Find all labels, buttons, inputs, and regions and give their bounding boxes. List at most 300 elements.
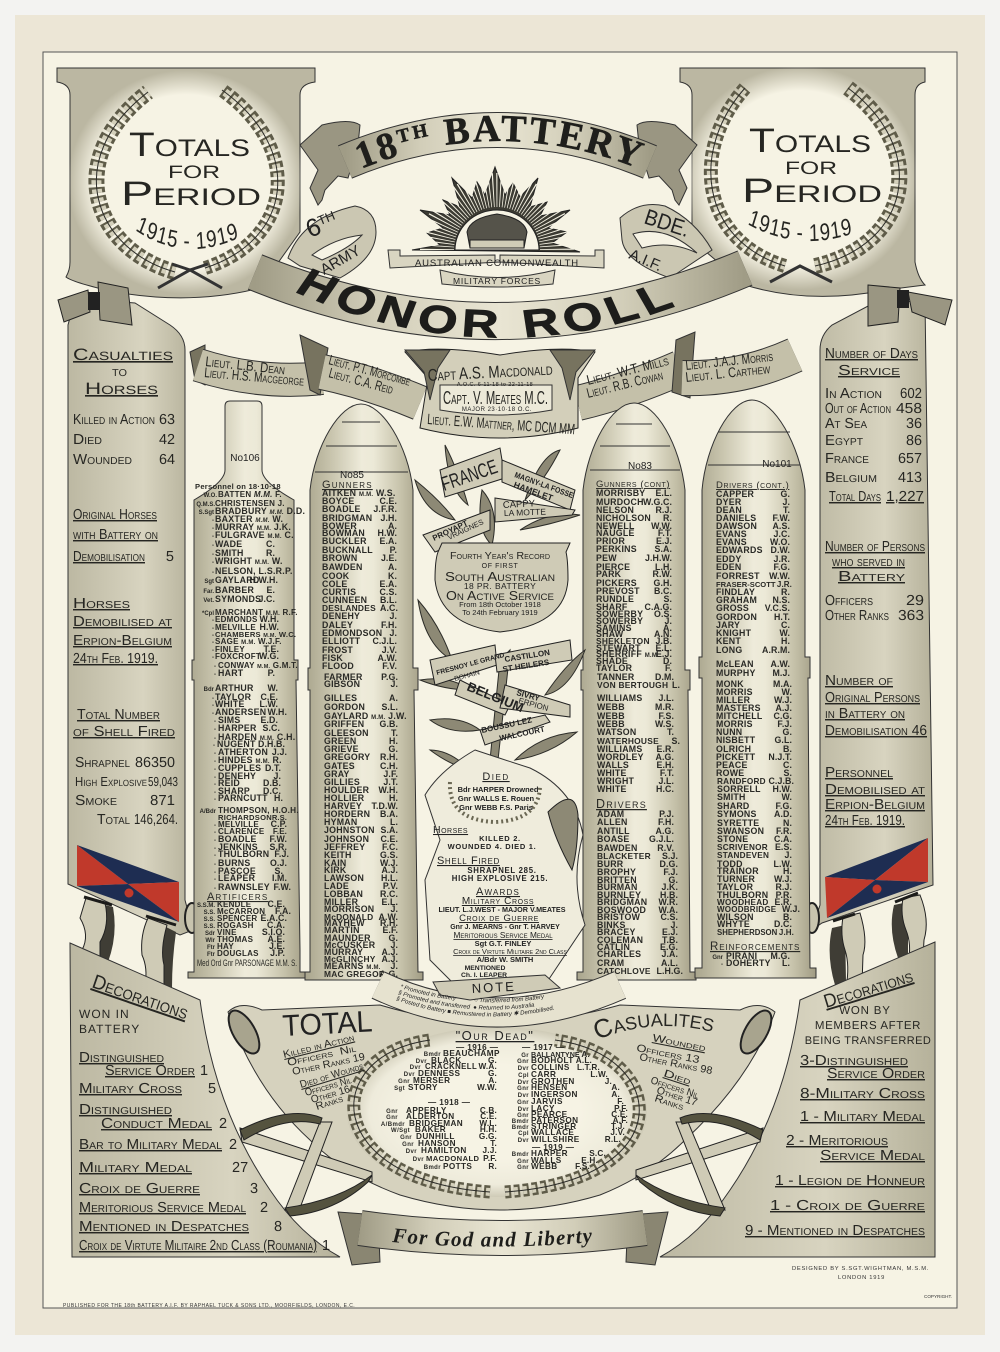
roster: personnel: GAYLARD — [215, 575, 259, 585]
ribbon ends — [300, 122, 697, 205]
casualties title: Casualites — [594, 1014, 714, 1038]
ray stripes — [437, 190, 557, 250]
roster: gunners: G.S. — [380, 850, 398, 860]
roster: gunners: P.V. — [383, 881, 398, 891]
text: casualties: High Explosive — [75, 774, 147, 789]
roll: 1916 and 1918: R. — [488, 1162, 497, 1171]
roster: personnel: BAXTER M.M. W. — [215, 514, 283, 524]
la motte text: LA MOTTE — [504, 507, 546, 518]
roster: personnel: H. — [274, 793, 283, 803]
roster: drivers continued: STONE — [717, 834, 748, 844]
roll: 1916 and 1918: Dvr — [416, 1059, 427, 1065]
roster: drivers continued: L.W. — [774, 859, 792, 869]
roll: 1916 and 1918: — 1916 — — [456, 1043, 499, 1052]
roster: drivers continued: SHEPHERDSON — [717, 928, 778, 937]
roll: 1917 and 1919: E.H. — [581, 1156, 598, 1165]
text: casualties: with Battery on — [73, 527, 158, 543]
roster: gunners continued: ANTILL — [597, 826, 630, 836]
roster: drivers continued: TURNER — [717, 874, 756, 884]
roster: drivers continued: W.J. — [774, 874, 792, 884]
roster: personnel: - — [214, 759, 216, 765]
roster: personnel: DENEHY — [218, 771, 256, 781]
roster: personnel: ANDERSEN — [215, 707, 266, 717]
roster: gunners: BOWMAN — [322, 528, 365, 538]
killed in action left notes: Other 16 — [310, 1083, 351, 1106]
panel: number of days service — [812, 285, 952, 930]
roll: 1917 and 1919: WEBB — [531, 1162, 558, 1171]
roster: drivers continued: DOHERTY — [726, 958, 771, 968]
roster: personnel: Personnel on 18·10·18 — [195, 482, 281, 491]
roster: gunners continued: J. — [664, 616, 672, 626]
roster: gunners continued: S. — [663, 594, 672, 604]
won in battery: Military Cross — [79, 1081, 182, 1097]
roster: personnel: SAGE M.M. W.J.F. — [215, 637, 282, 646]
roster: gunners continued: S.J. — [662, 851, 678, 861]
roster: personnel: O.J. — [270, 858, 287, 868]
ribbon crescent — [633, 231, 697, 253]
won in battery: Croix de Virtute Militaire 2nd Class (Roumania) — [79, 1238, 317, 1254]
scroll curl right — [805, 903, 819, 933]
transferred text: WON BY — [839, 1005, 891, 1017]
roll: 1916 and 1918: STORY — [408, 1083, 438, 1092]
record text: OF FIRST — [482, 563, 518, 570]
roster: gunners continued: PEW — [596, 553, 617, 563]
roster: gunners continued: WATERHOUSE — [597, 736, 659, 746]
record text: Fourth Year's Record — [450, 550, 550, 562]
text: days: Demobilised at — [825, 782, 925, 798]
roll: 1917 and 1919: Bmdr — [512, 1152, 529, 1158]
roster: drivers continued: P.R. — [776, 890, 792, 900]
roll: 1917 and 1919: Gnr — [517, 1100, 529, 1106]
text: days: 1,227 — [886, 489, 924, 505]
roster: drivers continued: T. — [783, 505, 790, 515]
roster: gunners continued: SOWERBY — [596, 609, 643, 619]
bohain text: BOHAIN — [454, 669, 481, 683]
wounded right notes: Other 17 — [655, 1084, 699, 1109]
total title: TOTAL — [282, 1005, 373, 1043]
roster: gunners: LAWSON — [324, 873, 364, 883]
roll: 1916 and 1918: HANSON — [418, 1139, 456, 1148]
roster: personnel: MARCHANT M.M. R.F. — [215, 608, 298, 617]
roll: 1917 and 1919: HENSEN — [531, 1083, 568, 1092]
heading: totals for period right: for — [785, 152, 837, 180]
roster: personnel: R. — [266, 548, 275, 558]
shell fired — [437, 855, 548, 883]
roster: gunners — [322, 479, 407, 979]
roll: 1917 and 1919 — [512, 1043, 628, 1171]
roster: gunners: H. — [389, 793, 398, 803]
won in battery: Meritorious Service Medal — [79, 1200, 246, 1216]
killed in action left notes: Officers Nil — [304, 1074, 353, 1099]
roster: personnel: J.P. — [270, 948, 285, 958]
roster: drivers continued: SWANSON — [717, 826, 764, 836]
roster: gunners continued: J.B. — [655, 636, 672, 646]
battery text: BATTERY — [443, 116, 645, 166]
roster: gunners: A.J. — [381, 865, 398, 875]
magny text: MAGNY-LA FOSSE — [513, 470, 575, 500]
badge: rising sun — [388, 167, 604, 287]
roster: gunners: BUCKNALL — [322, 545, 373, 555]
roster: drivers continued: H. — [781, 636, 790, 646]
roster: drivers continued: H.T. — [774, 612, 790, 622]
roster: drivers continued: F.R. — [776, 826, 792, 836]
roster: personnel: - — [214, 830, 216, 836]
roster: gunners: P. — [390, 545, 397, 555]
roll: 1917 and 1919: Bmdr — [512, 1119, 529, 1125]
roster: personnel: I.M. — [272, 873, 287, 883]
roster: gunners: A. — [389, 693, 398, 703]
roster: gunners continued: J.L. — [658, 776, 674, 786]
black tab — [88, 292, 100, 310]
roster: drivers continued: PEACE — [716, 760, 748, 770]
roster: gunners continued: SHAW — [596, 629, 624, 639]
roster: gunners: A.W. — [379, 912, 398, 922]
text: casualties: 871 — [150, 793, 175, 809]
roll: 1916 and 1918: Dvr — [404, 1072, 415, 1078]
roster: drivers continued: C. — [783, 760, 792, 770]
roster: personnel: - — [212, 570, 214, 576]
roster: gunners: KAIN — [324, 858, 347, 868]
killed in action left notes: Died of Wounds — [298, 1060, 365, 1091]
note line one: * Promoted in Battery ○ Transferred from Battery — [401, 984, 544, 1002]
roll: 1917 and 1919: Dvr — [518, 1107, 529, 1113]
roster: gunners: GRAY — [324, 769, 350, 779]
text: days: Original Persons — [825, 690, 920, 706]
roster: gunners continued: VON BERTOUGH — [597, 680, 668, 690]
roster: gunners: R.H. — [380, 752, 398, 762]
roster: drivers continued: G. — [782, 727, 792, 737]
copyright: COPYRIGHT. — [924, 1294, 952, 1299]
roster: gunners: MURRAY — [324, 947, 363, 957]
roster: gunners: S.L. — [381, 702, 398, 712]
roll: 1917 and 1919: Gr — [521, 1053, 529, 1059]
roster: drivers continued: MORRIS — [716, 687, 753, 697]
won in battery: 2 — [219, 1116, 227, 1132]
ribbon: 18th Battery — [299, 112, 698, 206]
roster: gunners continued: NEWELL — [596, 521, 635, 531]
roster: drivers continued: GROSS — [716, 603, 749, 613]
roster: gunners: GORDON — [324, 702, 365, 712]
roster: personnel: RAWNSLEY — [218, 882, 270, 892]
panel: decorations won by transferred members — [660, 942, 935, 1257]
text: days: Personnel — [825, 765, 893, 781]
roster: gunners continued: MORRISBY — [596, 488, 645, 498]
roll: 1917 and 1919: Gnr — [517, 1113, 529, 1119]
roll: 1917 and 1919: F. — [617, 1097, 624, 1106]
won in battery: BATTERY — [79, 1022, 140, 1036]
roster: drivers continued: S. — [783, 768, 792, 778]
roster: gunners continued: E.J. — [656, 536, 672, 546]
roll: 1917 and 1919: Dvr — [518, 1080, 529, 1086]
roster: drivers continued: SCRIVENOR — [717, 843, 768, 852]
awards: A/Bdr W. SMITH — [477, 955, 533, 964]
roster: gunners continued: F.S. — [658, 711, 674, 721]
text: days: 657 — [898, 451, 922, 467]
won in battery: WON IN — [79, 1007, 130, 1021]
roster: gunners: J.H. — [380, 513, 397, 523]
wounded right notes: Ranks — [653, 1092, 686, 1113]
roster: gunners continued: R.J. — [655, 505, 672, 515]
roster: gunners: W.H. — [379, 785, 398, 795]
died names: Gnr WALLS E. Rouen — [458, 794, 535, 803]
roster: gunners continued: G. — [668, 875, 678, 885]
roster: drivers continued: A.W. — [771, 659, 790, 669]
roster: drivers continued: A.D. — [774, 809, 792, 819]
roster: drivers continued: JARY — [716, 620, 740, 630]
france text: FRANCE — [438, 456, 500, 496]
roster: personnel: CUPPLES — [218, 763, 261, 773]
roster: personnel: PARNCUTT — [218, 793, 268, 803]
roster: drivers continued: WHYTE — [717, 919, 750, 929]
roster: gunners: JOHNSTON — [324, 825, 375, 835]
roster: personnel — [195, 482, 305, 968]
roster: personnel: BRADBURY M.M. D.D. — [215, 506, 305, 516]
ribbons: france — [423, 448, 575, 552]
awards: Croix de Guerre — [459, 913, 539, 924]
text: casualties: Horses — [73, 596, 130, 612]
roster: gunners continued: NICHOLSON — [596, 513, 651, 523]
roster: gunners: BAWDEN — [322, 562, 363, 572]
black tab right — [897, 290, 909, 308]
roll: 1917 and 1919: PATERSON — [531, 1116, 578, 1125]
heading: totals for period right: 1915 - 1919 — [748, 211, 851, 242]
designer credit: DESIGNED BY S.SGT.WIGHTMAN, M.S.M. — [792, 1266, 929, 1272]
roll: 1917 and 1919: Cpl — [518, 1073, 529, 1079]
roster: gunners continued: P.J. — [659, 809, 674, 819]
roster: personnel: - — [214, 846, 216, 852]
roster: gunners continued: R.V. — [657, 843, 674, 853]
record text — [445, 550, 555, 617]
roster: gunners continued: A.G. — [656, 826, 674, 836]
roster: drivers continued: TAYLOR — [717, 882, 754, 892]
roster: gunners: JEFFREY — [324, 842, 365, 852]
roll: 1917 and 1919: A. — [611, 1090, 620, 1099]
roster: gunners: HORDERN — [324, 809, 370, 819]
designer credit — [792, 1266, 929, 1281]
roll: 1916 and 1918: BAKER — [415, 1125, 446, 1134]
roster: gunners: MAC GREGOR — [324, 969, 385, 979]
text: days: 29 — [906, 593, 924, 609]
roll: 1917 and 1919: A.F. — [613, 1116, 628, 1125]
roster: personnel: MELVILLE — [218, 820, 259, 829]
roster: gunners continued: ALLEN — [597, 817, 628, 827]
roster: gunners continued: R. — [663, 513, 672, 523]
roster: personnel: PASCOE — [218, 866, 256, 876]
roll: 1917 and 1919: Gnr — [517, 1086, 529, 1092]
roll: 1917 and 1919: A.L. — [576, 1056, 592, 1065]
roster: gunners: MILLER — [324, 897, 359, 907]
roster: gunners continued: WILLIAMS — [597, 744, 642, 754]
record text: South Australian — [445, 569, 555, 584]
roll: 1916 and 1918: W/Sgt — [391, 1128, 410, 1134]
roster: drivers continued: LONG — [716, 645, 742, 655]
roster: gunners: FARMER — [324, 672, 363, 682]
roll: 1917 and 1919: BODHOLT — [531, 1056, 574, 1065]
scroll straps left — [78, 897, 199, 996]
text: casualties: Killed in Action — [73, 412, 155, 428]
roster: personnel: W.G. — [259, 651, 279, 661]
text: days: Number of Days — [825, 346, 918, 362]
roster: drivers continued: FINDLAY — [716, 587, 755, 597]
roster: drivers continued: WOODHEAD — [717, 898, 769, 907]
roster: personnel: CLARENCE — [218, 827, 265, 836]
text: casualties: 5 — [166, 549, 174, 565]
won in battery: Distinguished — [79, 1050, 164, 1066]
roster: gunners continued: STEWART — [596, 643, 641, 653]
shell number: No83 — [628, 461, 652, 472]
roster: drivers continued: FRASER-SCOTT — [716, 580, 776, 589]
roster: drivers continued: - — [721, 962, 723, 968]
straps: right crossing — [636, 1114, 763, 1216]
roster: gunners continued: J.L. — [658, 693, 674, 703]
roll: 1916 and 1918: HAMILTON — [421, 1146, 467, 1155]
roster: personnel: RICHARDSON — [218, 813, 272, 822]
roster: personnel: - — [212, 526, 214, 532]
panel: totals for period left — [56, 68, 316, 298]
roster: personnel: MURRAY M.M. J.K. — [215, 522, 291, 532]
roster: gunners: H.W. — [378, 528, 397, 538]
text: days: 413 — [898, 470, 922, 486]
crown — [467, 214, 527, 248]
strap backs — [830, 902, 908, 985]
roster: gunners: ELLIOTT — [322, 636, 361, 646]
roster: gunners: EDMONDSON — [322, 628, 382, 638]
roster: drivers continued: B. — [783, 912, 792, 922]
wounded right notes — [635, 1032, 714, 1113]
roster: gunners: G. — [388, 933, 398, 943]
roster: gunners continued: D.G. — [660, 859, 678, 869]
roster: personnel: D.C. — [263, 786, 281, 796]
roster: gunners continued: H.B. — [660, 890, 678, 900]
roster: personnel: BATTEN M.M. F. — [218, 490, 282, 499]
roster: gunners: MAYHEW — [324, 918, 365, 928]
scroll curl left — [185, 903, 199, 933]
roster: gunners continued — [596, 479, 683, 976]
roster: personnel: E.A.C. — [260, 913, 287, 923]
roster: drivers continued: J. — [782, 497, 790, 507]
roster: personnel: J. — [273, 771, 281, 781]
roster: personnel: Sgt — [204, 579, 214, 585]
won in battery: 27 — [232, 1160, 248, 1176]
roster: personnel: S.R. — [269, 842, 287, 852]
decorations heading right: Decorations — [821, 966, 916, 1013]
roster: gunners continued: SHARF — [596, 602, 628, 612]
won in battery — [79, 1007, 330, 1254]
walcourt text: WALCOURT — [499, 725, 546, 743]
roster: personnel: - — [212, 518, 214, 524]
roll: 1917 and 1919: WALLACE — [531, 1128, 574, 1137]
roster: gunners continued: SHADE — [596, 656, 628, 666]
roster: gunners: FROST — [322, 645, 353, 655]
roll: 1917 and 1919: J.V. — [610, 1128, 625, 1137]
roster: drivers continued: PIRANI — [726, 951, 757, 961]
roster: personnel: ROGASH — [217, 921, 254, 930]
roster: drivers continued: L. — [782, 958, 790, 968]
roll: 1916 and 1918: — 1918 — — [428, 1098, 471, 1107]
roster: personnel: - — [214, 877, 216, 883]
panel: decorations won in battery — [70, 943, 340, 1257]
text: days: Battery — [838, 569, 905, 585]
roster: gunners: J. — [389, 611, 397, 621]
roster: gunners continued: BURR — [597, 859, 624, 869]
record text: On Active Service — [446, 588, 554, 603]
officers text left: Lieut. H.S. Macgeorge — [204, 364, 305, 389]
awards: Military Cross — [462, 896, 534, 907]
roster: gunners: BRIDGMAN — [322, 513, 372, 523]
roster: personnel: HARDEN M.M. C.H. — [218, 732, 295, 742]
shell fired: HIGH EXPLOSIVE 215. — [452, 874, 548, 883]
roster: personnel: - — [214, 870, 216, 876]
roster: personnel: BURNS — [218, 858, 251, 868]
ribbon: honor roll — [248, 250, 752, 340]
roster: gunners continued: CRAM — [597, 958, 624, 968]
roster: personnel: CONWAY M.M. G.M.T. — [218, 661, 298, 670]
roster: gunners: GAYLARD M.M. J.W. — [324, 711, 407, 721]
transferred text: 2 - Meritorious — [786, 1133, 888, 1149]
ribbon: Bde AIF — [620, 204, 712, 278]
roster: gunners continued: W.W. — [651, 521, 672, 531]
roster: gunners continued: C.A.G. — [645, 602, 672, 612]
roster: gunners: LOBBAN — [324, 889, 363, 899]
roster: gunners: J.V. — [382, 645, 397, 655]
roster: gunners continued: PREVOST — [596, 586, 640, 596]
roster: drivers continued: C.J.B. — [768, 776, 794, 786]
wounded right notes: Other Ranks 98 — [638, 1051, 714, 1077]
roster: drivers continued: DAWSON — [716, 521, 757, 531]
vraignes text: VRAIGNES — [446, 517, 485, 542]
wounded right notes: Wounded — [651, 1032, 707, 1054]
wounded right notes: Officers Nil — [649, 1074, 700, 1101]
officers text left: Lieut. P.T. Morcombe — [327, 351, 413, 389]
roll: 1917 and 1919: LACY — [531, 1104, 555, 1113]
record text: From 18th October 1918 — [459, 600, 541, 609]
roster: gunners continued: L. — [672, 680, 680, 690]
roster: personnel: SMITH — [215, 548, 244, 558]
roster: personnel: REID — [218, 778, 240, 788]
army label: ARMY — [318, 242, 364, 278]
roster: drivers continued: SYMONS — [717, 809, 757, 819]
text: days: Number of — [825, 673, 893, 689]
our dead oval — [347, 1027, 647, 1197]
roster: personnel: Ftr — [207, 945, 216, 951]
text: casualties: Total Number — [77, 707, 160, 723]
flying ribbon right — [868, 285, 952, 326]
roster: gunners continued: PERKINS — [596, 544, 637, 554]
roster: personnel: W. — [268, 683, 278, 693]
roster: personnel: LEAPER — [218, 873, 256, 883]
roster: gunners continued: WEBB — [597, 711, 625, 721]
roster: drivers continued: KNIGHT — [716, 628, 752, 638]
meates: Capt. V. Meates M.C. — [443, 388, 548, 408]
roster: personnel: - — [212, 703, 214, 709]
roster: personnel: - — [214, 862, 216, 868]
won in battery: Bar to Military Medal — [79, 1137, 222, 1153]
roster: personnel: D.B. — [263, 778, 281, 788]
text: days: Number of Persons — [825, 539, 925, 555]
roster: personnel: A/Bdr — [200, 809, 217, 815]
roster: gunners continued: F.T. — [660, 768, 674, 778]
roster: personnel: J.C. — [258, 594, 275, 604]
roster: gunners: L. — [390, 817, 398, 827]
won in battery: 2 — [260, 1200, 268, 1216]
roster: personnel: JENKINS — [218, 842, 258, 852]
nose rings — [315, 422, 408, 472]
roll: 1917 and 1919: Gnr — [517, 1159, 529, 1165]
roster: gunners: BUCKLER — [322, 536, 367, 546]
roster: personnel: T.E. — [263, 644, 279, 654]
hamelet text: HAMELET — [512, 479, 555, 503]
roster: gunners continued: TAYLOR — [596, 663, 633, 673]
